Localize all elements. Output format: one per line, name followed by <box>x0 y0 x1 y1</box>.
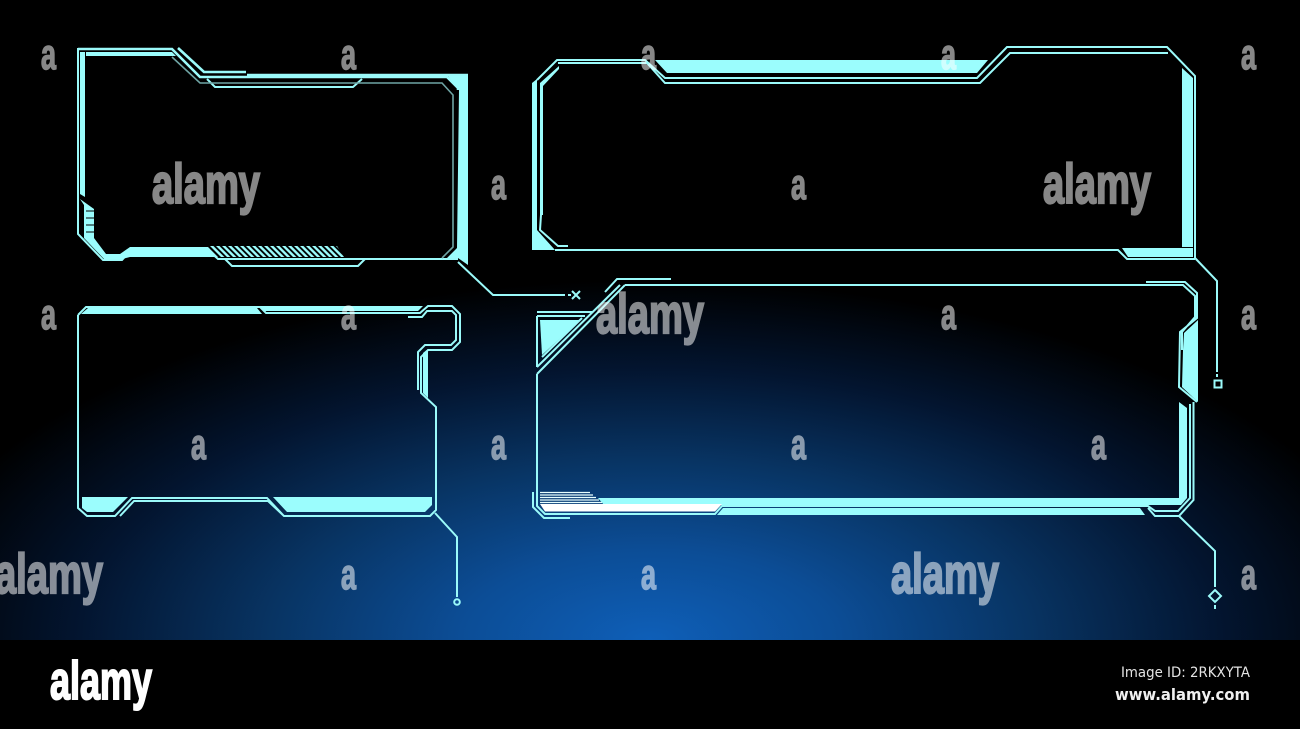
frame 2 outline <box>537 47 1195 259</box>
watermark: small letters: a <box>341 551 357 599</box>
watermark: large wordmarks: alamy <box>1043 152 1151 215</box>
watermark: small letters: a <box>491 421 507 469</box>
frame 4 bottom band <box>598 498 1187 515</box>
watermark: large wordmarks: alamy <box>891 542 999 605</box>
watermark: small letters: a <box>641 551 657 599</box>
watermark: small letters: a <box>1241 551 1257 599</box>
frame 4 connector and diamond node <box>1179 516 1215 609</box>
frame 4 corner triangle <box>540 320 580 355</box>
footer website: www.alamy.com <box>1115 685 1250 704</box>
watermark: small letters: a <box>41 31 57 79</box>
frame 2 solid bars <box>532 60 1193 257</box>
panel: bottom-right frame <box>533 279 1221 609</box>
watermark: small letters: a <box>791 421 807 469</box>
watermark: large wordmarks <box>0 152 1151 605</box>
panel: top-left frame <box>78 48 468 266</box>
watermark: small letters: a <box>1091 421 1107 469</box>
panel: bottom-left frame <box>78 306 460 605</box>
watermark: small letters: a <box>641 31 657 79</box>
frame 1 solid bars <box>80 52 468 265</box>
frame 4 striped wedge <box>540 492 602 502</box>
footer bar <box>0 640 1300 729</box>
frame 1 hatch <box>208 246 344 257</box>
watermark: small letters: a <box>941 31 957 79</box>
frame 3 solid bars <box>81 306 432 512</box>
watermark: small letters: a <box>341 31 357 79</box>
frame 4 white bar <box>540 504 722 512</box>
footer image id: Image ID: 2RKXYTA <box>1121 665 1250 681</box>
frame 3 connector and node <box>435 513 457 597</box>
panel: top-right frame <box>532 47 1222 388</box>
frame 2 connector and square node <box>1195 258 1217 377</box>
watermark: small letters: a <box>491 161 507 209</box>
connector: cross marker <box>458 262 580 299</box>
frame 4 side block <box>1179 320 1198 498</box>
watermark: small letters: a <box>191 421 207 469</box>
frame 3 outline <box>78 306 460 516</box>
watermark: small letters: a <box>791 161 807 209</box>
frame 4 outline <box>533 279 1197 518</box>
frame 1 inner grey line <box>172 57 453 258</box>
watermark: large wordmarks: alamy <box>596 282 704 345</box>
watermark: large wordmarks: alamy <box>152 152 260 215</box>
frame 1 small ticks <box>86 211 95 232</box>
watermark: small letters: a <box>41 291 57 339</box>
watermark: small letters <box>41 31 1257 599</box>
frame 1 outline <box>78 48 468 90</box>
watermark: small letters: a <box>1241 291 1257 339</box>
footer logo: alamy <box>50 651 152 711</box>
watermark: small letters: a <box>341 291 357 339</box>
watermark: small letters: a <box>1241 31 1257 79</box>
watermark: small letters: a <box>941 291 957 339</box>
